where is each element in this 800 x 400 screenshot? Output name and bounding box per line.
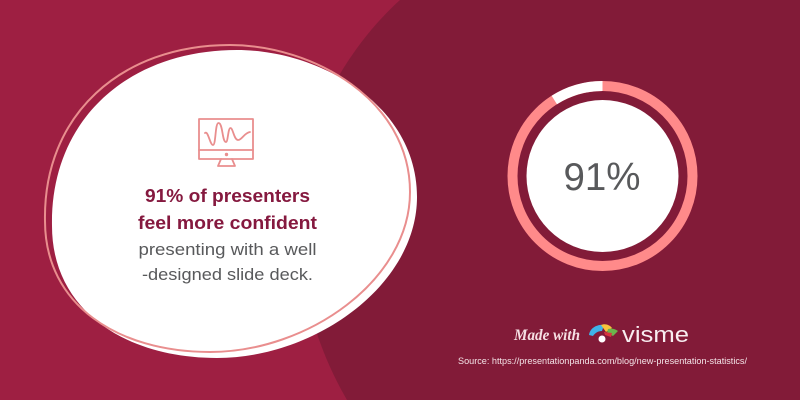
panel: white blob with statistic <box>45 45 417 358</box>
icon: visme logo mark <box>589 324 618 342</box>
chart value: 91% <box>564 156 640 199</box>
inner white circle <box>526 100 678 252</box>
remaining 9% arc <box>554 86 602 100</box>
body text: presenting with a well <box>138 240 316 259</box>
body text: -designed slide deck. <box>142 265 313 284</box>
heading: bold statistic: 91% of presenters <box>145 186 310 206</box>
made with visme logo: visme <box>622 322 689 347</box>
heading: bold statistic: feel more confident <box>138 213 317 233</box>
made with visme logo <box>513 322 689 347</box>
source text: Source: https://presentationpanda.com/blog/new-presentation-statistics/ <box>458 356 747 367</box>
icon: desktop monitor with wave <box>199 119 253 166</box>
body text <box>138 240 316 284</box>
heading: bold statistic <box>138 186 317 233</box>
blob outline <box>45 45 410 352</box>
donut chart: 91% <box>512 86 692 266</box>
made with visme logo: Made with <box>513 327 580 344</box>
dark background panel <box>298 0 800 400</box>
